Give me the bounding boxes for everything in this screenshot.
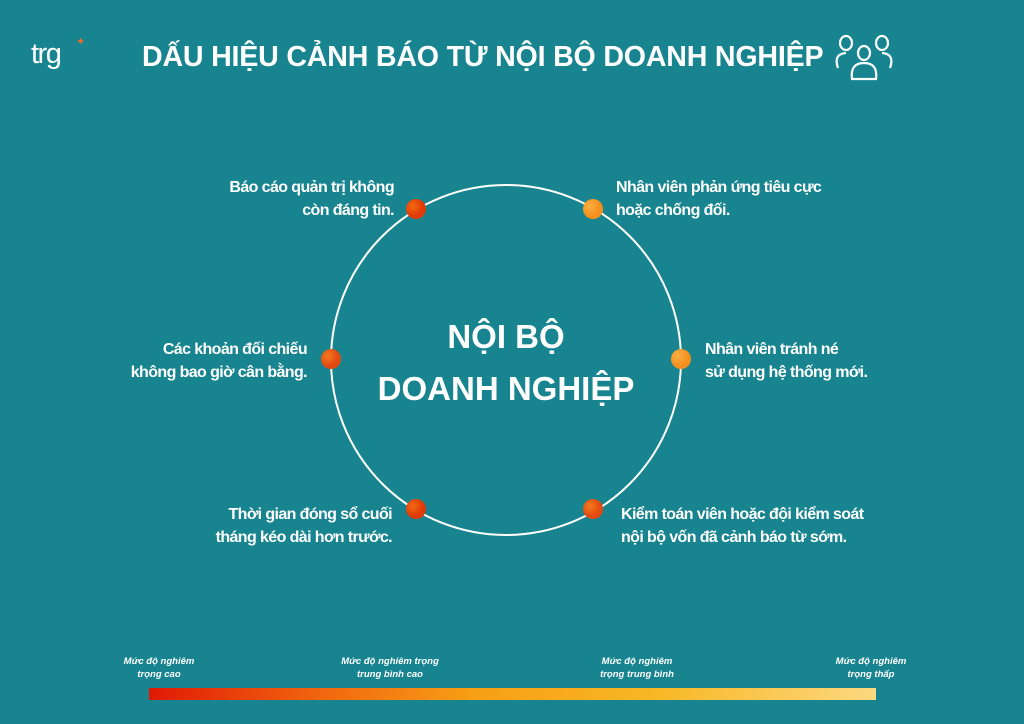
dot: right bbox=[671, 349, 691, 369]
legend labels: Mức độ nghiêm bbox=[602, 656, 672, 667]
text: ✦ bbox=[76, 36, 84, 48]
text: right: Nhân viên tránh né bbox=[705, 341, 838, 358]
text: top-left: còn đáng tin. bbox=[302, 202, 394, 219]
text: bottom-right: nội bộ vốn đã cảnh báo từ sớm. bbox=[621, 529, 846, 546]
text: left: Các khoản đối chiếu bbox=[163, 341, 307, 358]
text: bottom-left: Thời gian đóng sổ cuối bbox=[228, 506, 392, 523]
logo bbox=[31, 36, 84, 70]
text: top-right: Nhân viên phản ứng tiêu cực bbox=[616, 179, 821, 196]
text: left: không bao giờ cân bằng. bbox=[131, 364, 307, 381]
text: top-left: Báo cáo quản trị không bbox=[229, 179, 394, 196]
text: left bbox=[131, 341, 307, 381]
legend labels: trọng cao bbox=[137, 669, 181, 680]
dot: top-right bbox=[583, 199, 603, 219]
logo: trg bbox=[31, 38, 60, 70]
text: right bbox=[705, 341, 867, 381]
text: bottom-right: Kiểm toán viên hoặc đội kiểm soát bbox=[621, 506, 864, 523]
center heading: DOANH NGHIỆP bbox=[378, 370, 634, 407]
center heading bbox=[378, 318, 634, 407]
text: top-left bbox=[229, 179, 394, 219]
dot: bottom-right bbox=[583, 499, 603, 519]
dot: left bbox=[321, 349, 341, 369]
center heading: NỘI BỘ bbox=[447, 318, 565, 355]
dot: bottom-left bbox=[406, 499, 426, 519]
legend labels: trọng thấp bbox=[848, 669, 894, 680]
legend labels bbox=[124, 656, 906, 680]
text: bottom-left: tháng kéo dài hơn trước. bbox=[216, 529, 392, 546]
icon: people bbox=[836, 34, 892, 80]
dot: top-left bbox=[406, 199, 426, 219]
text: top-right bbox=[616, 179, 822, 219]
title: DẤU HIỆU CẢNH BÁO TỪ NỘI BỘ DOANH NGHIỆP bbox=[142, 41, 823, 73]
text: top-right: hoặc chống đối. bbox=[616, 202, 730, 219]
legend labels: trung bình cao bbox=[357, 669, 423, 680]
text: right: sử dụng hệ thống mới. bbox=[705, 364, 867, 381]
text: bottom-left bbox=[216, 506, 392, 546]
legend labels: Mức độ nghiêm trọng bbox=[341, 656, 439, 667]
legend labels: Mức độ nghiêm bbox=[124, 656, 194, 667]
legend labels: trọng trung bình bbox=[600, 669, 674, 680]
legend labels: Mức độ nghiêm bbox=[836, 656, 906, 667]
text: bottom-right bbox=[621, 506, 864, 546]
severity gradient bar bbox=[149, 688, 876, 700]
